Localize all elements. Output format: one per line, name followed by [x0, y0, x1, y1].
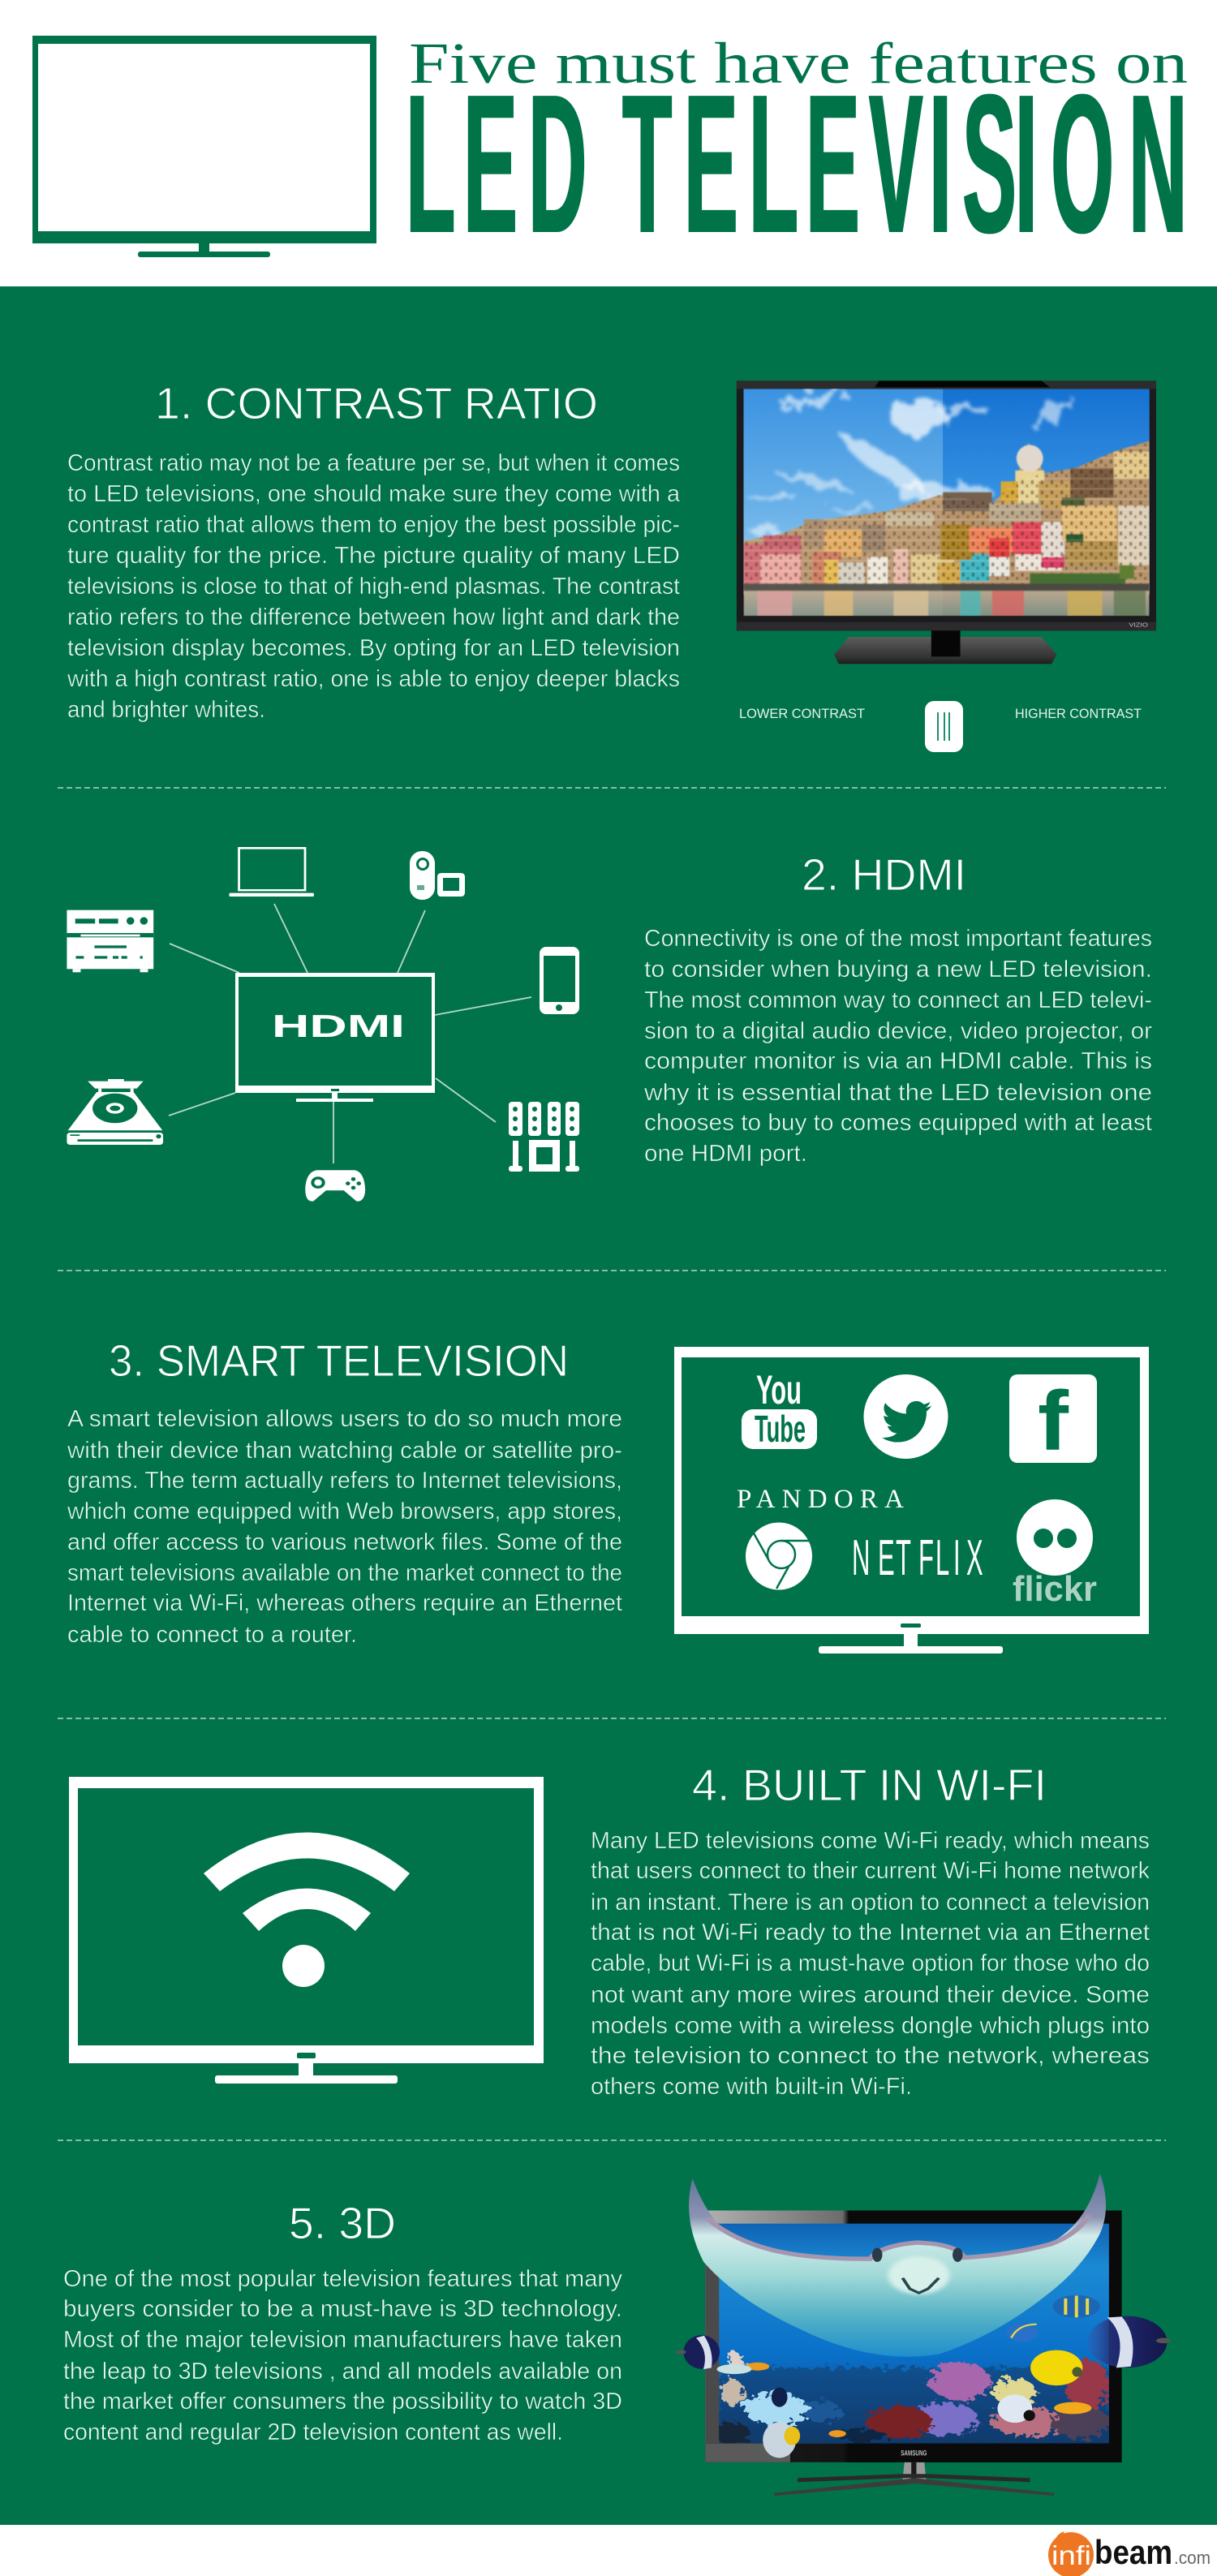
heading: contrast ratio: 1. CONTRAST RATIO: [155, 378, 598, 428]
text block: 3d: the market offer consumers the possibility to watch 3D: [63, 2389, 622, 2415]
panel: 4 built in wi-fi: [69, 1760, 1150, 2100]
text block: smart television: with their device than watching cable or satellite pro-: [67, 1438, 622, 1464]
panel: 2 hdmi: [67, 847, 1152, 1202]
title: Five must have features on: [409, 31, 1188, 96]
logo: youtube: Tube: [755, 1408, 806, 1450]
logo: infibeam: .com: [1174, 2548, 1211, 2568]
text block: 3d: content and regular 2D television content as well.: [63, 2419, 563, 2445]
text block: contrast ratio: to LED televisions, one should make sure they come with a: [67, 481, 681, 507]
text block: hdmi: sion to a digital audio device, video projector, or: [644, 1018, 1152, 1044]
icon: header television outline: [32, 36, 376, 257]
panel: 5 3d: [63, 2174, 1171, 2496]
text block: smart television: smart televisions available on the market connect to the: [67, 1560, 622, 1586]
text block: contrast ratio: television display becomes. By opting for an LED television: [67, 635, 680, 661]
text block: smart television: and offer access to various network files. Some of the: [67, 1529, 622, 1555]
heading: smart television: 3. SMART TELEVISION: [109, 1335, 569, 1386]
logo: infibeam: beam: [1094, 2533, 1172, 2571]
text block: contrast ratio: and brighter whites.: [67, 697, 265, 723]
text block: contrast ratio: Contrast ratio may not be a feature per se, but when it comes: [67, 450, 680, 476]
illustration: smart tv with app logos: [674, 1347, 1149, 1654]
text block: built in wi-fi: models come with a wireless dongle which plugs into: [591, 2013, 1150, 2039]
connector lines: [169, 904, 531, 1163]
text: vizio: VIZIO: [1129, 621, 1148, 629]
illustration: tv with wi-fi symbol: [69, 1777, 544, 2084]
text block: 3d: buyers consider to be a must-have is 3D technology.: [63, 2296, 622, 2322]
text block: built in wi-fi: not want any more wires around their device. Some: [591, 1982, 1150, 2008]
text block: 3d: One of the most popular television features that many: [63, 2266, 622, 2292]
logo: twitter: [863, 1374, 948, 1459]
text block: built in wi-fi: others come with built-in Wi-Fi.: [591, 2074, 912, 2100]
text block: built in wi-fi: [591, 1828, 1150, 2100]
label: lower contrast: LOWER CONTRAST: [739, 706, 865, 721]
icon: laptop: [229, 847, 314, 897]
icon: wi-fi signal: [204, 1832, 410, 1987]
icon: speaker set: [509, 1102, 579, 1172]
text: samsung: SAMSUNG: [901, 2450, 927, 2458]
panel: 3 smart television: [67, 1335, 1149, 1654]
text block: hdmi: chooses to buy to comes equipped with at least: [644, 1110, 1152, 1136]
panel: 1 contrast ratio: [67, 378, 1156, 752]
text block: smart television: Internet via Wi-Fi, whereas others require an Ethernet: [67, 1590, 622, 1616]
stand: [774, 2462, 1054, 2496]
fish crossing the bezel: [1087, 2316, 1167, 2367]
text: hdmi logo: HDMI: [272, 1009, 405, 1044]
text block: built in wi-fi: in an instant. There is an option to connect a television: [591, 1890, 1150, 1916]
text block: hdmi: computer monitor is via an HDMI cable. This is: [644, 1048, 1152, 1074]
text block: built in wi-fi: that users connect to their current Wi-Fi home network: [591, 1858, 1150, 1884]
text block: built in wi-fi: that is not Wi-Fi ready to the Internet via an Ethernet: [591, 1920, 1150, 1946]
label: higher contrast: HIGHER CONTRAST: [1015, 706, 1142, 721]
text block: smart television: cable to connect to a router.: [67, 1622, 357, 1648]
logo: netflix: NETFLIX: [852, 1531, 983, 1586]
text block: built in wi-fi: Many LED televisions come Wi-Fi ready, which means: [591, 1828, 1150, 1854]
text block: 3d: Most of the major television manufacturers have taken: [63, 2327, 622, 2353]
logo: facebook: [1009, 1374, 1097, 1469]
icon: central television: [235, 973, 435, 1102]
text block: contrast ratio: contrast ratio that allows them to enjoy the best possible pic-: [67, 512, 680, 538]
icon: camera: [410, 851, 465, 900]
text block: hdmi: to consider when buying a new LED television.: [644, 957, 1152, 983]
diagram: hdmi connections: [67, 847, 579, 1202]
logo: chrome: [746, 1522, 812, 1590]
logo: flickr: [1013, 1499, 1097, 1609]
logo: youtube: You: [756, 1367, 802, 1413]
text block: hdmi: [643, 926, 1152, 1167]
heading: 3d: 5. 3D: [289, 2198, 396, 2248]
text block: hdmi: one HDMI port.: [644, 1141, 807, 1167]
logo: infibeam: infi: [1051, 2540, 1091, 2570]
logo: infibeam: [1048, 2531, 1211, 2576]
text block: 3d: [63, 2266, 622, 2445]
icon: smartphone: [540, 947, 579, 1014]
illustration: 3d television with manta ray: [676, 2174, 1171, 2496]
illustration: television with coastal town photo: [737, 381, 1156, 664]
text block: hdmi: The most common way to connect an LED televi-: [644, 987, 1152, 1013]
icon: tv frame: [674, 1347, 1149, 1654]
text block: contrast ratio: ratio refers to the difference between how light and dark the: [67, 604, 680, 630]
heading: hdmi: 2. HDMI: [802, 849, 966, 900]
logo: youtube: [742, 1367, 817, 1450]
text block: contrast ratio: [67, 450, 681, 723]
text block: smart television: which come equipped with Web browsers, app stores,: [67, 1499, 622, 1525]
logo: facebook: f: [1038, 1374, 1069, 1469]
text block: hdmi: why it is essential that the LED television one: [643, 1080, 1152, 1106]
text block: smart television: grams. The term actually refers to Internet televisions,: [67, 1468, 622, 1494]
fish: [676, 2295, 1171, 2458]
heading: built in wi-fi: 4. BUILT IN WI-FI: [692, 1760, 1047, 1810]
text block: 3d: the leap to 3D televisions , and all models available on: [63, 2359, 622, 2385]
icon: disc player: [67, 1079, 163, 1145]
text block: smart television: A smart television allows users to do so much more: [67, 1406, 622, 1432]
text block: contrast ratio: with a high contrast ratio, one is able to enjoy deeper blacks: [67, 666, 680, 692]
title: LED TELEVISION: [406, 53, 1187, 274]
logo: pandora: PANDORA: [737, 1485, 904, 1514]
text block: built in wi-fi: the television to connect to the network, whereas: [591, 2043, 1150, 2069]
text block: hdmi: Connectivity is one of the most important features: [644, 926, 1152, 952]
icon: tv frame: [69, 1777, 544, 2084]
icon: contrast slider handle: [925, 701, 963, 752]
text block: smart television: [67, 1406, 622, 1648]
text block: contrast ratio: ture quality for the price. The picture quality of many LED: [67, 543, 680, 569]
text block: contrast ratio: televisions is close to that of high-end plasmas. The contrast: [67, 574, 680, 600]
icon: audio rack: [67, 910, 153, 972]
logo: flickr: flickr: [1013, 1569, 1097, 1609]
manta ray: [689, 2174, 1106, 2357]
text block: built in wi-fi: cable, but Wi-Fi is a must-have option for those who do: [591, 1950, 1150, 1976]
icon: game controller: [305, 1170, 365, 1202]
